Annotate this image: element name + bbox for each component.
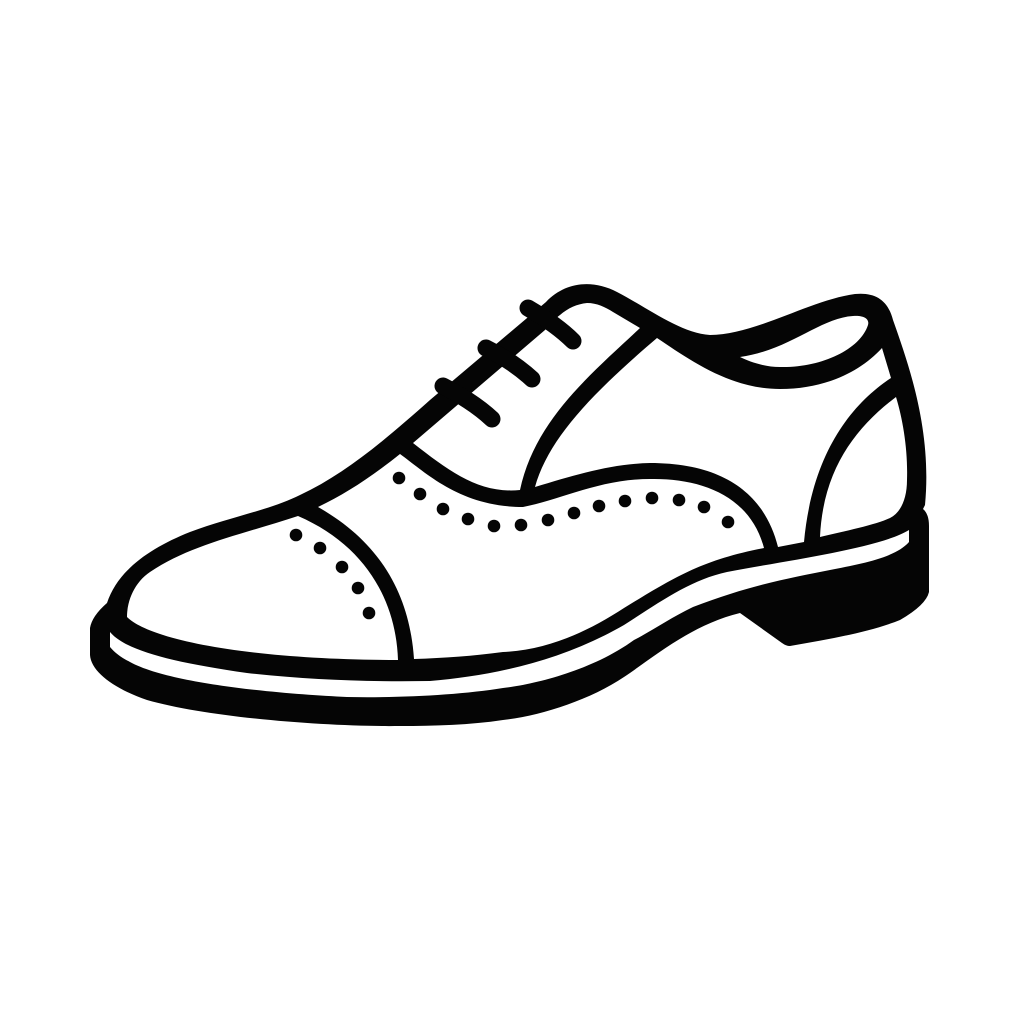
eyestay panel	[413, 303, 640, 490]
brogue dots: vamp	[393, 472, 734, 532]
middle lace	[486, 348, 532, 379]
toe cap panel	[127, 516, 398, 660]
quarter panel	[535, 338, 891, 547]
welt white strip	[110, 530, 909, 697]
laces	[443, 308, 573, 419]
black shoe silhouette including sole and heel	[90, 284, 929, 726]
collar opening	[740, 316, 868, 367]
vamp panel	[318, 454, 764, 659]
brogue dots: toe cap	[290, 529, 375, 619]
heel counter panel	[820, 397, 907, 537]
lower sole and upper panels	[110, 303, 909, 697]
top lace	[528, 308, 573, 341]
bottom lace	[443, 386, 492, 419]
